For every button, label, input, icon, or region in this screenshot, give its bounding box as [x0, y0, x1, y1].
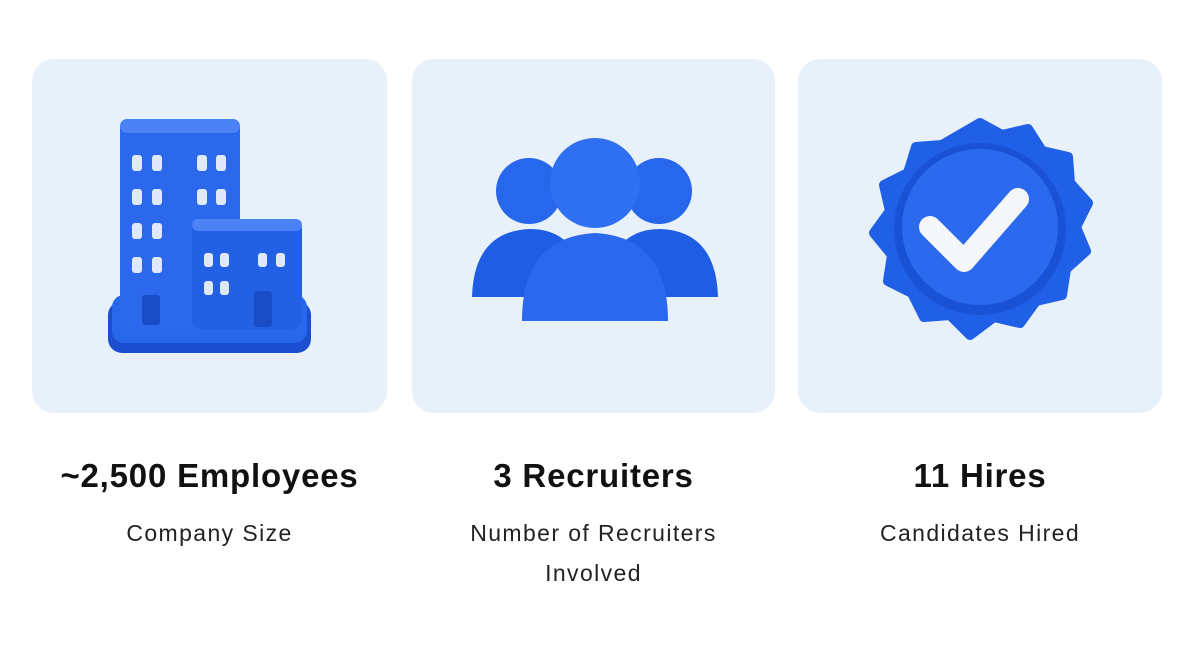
text: candidates hired: Candidates Hired	[880, 520, 1080, 546]
heading: employees: ~2,500 Employees	[60, 457, 359, 494]
icon: verified badge	[869, 118, 1094, 340]
text: recruiters involved: Number of Recruiters	[470, 520, 717, 546]
text: company size: Company Size	[126, 520, 293, 546]
panel: hires	[798, 59, 1162, 413]
panel: recruiters	[412, 59, 775, 413]
heading: recruiters: 3 Recruiters	[493, 457, 694, 494]
text: recruiters involved: Involved	[545, 560, 642, 586]
text: recruiters involved	[470, 520, 717, 586]
panel: company size	[32, 59, 387, 413]
heading: hires: 11 Hires	[913, 457, 1046, 494]
icon: building	[108, 119, 311, 353]
icon: people	[472, 138, 718, 321]
